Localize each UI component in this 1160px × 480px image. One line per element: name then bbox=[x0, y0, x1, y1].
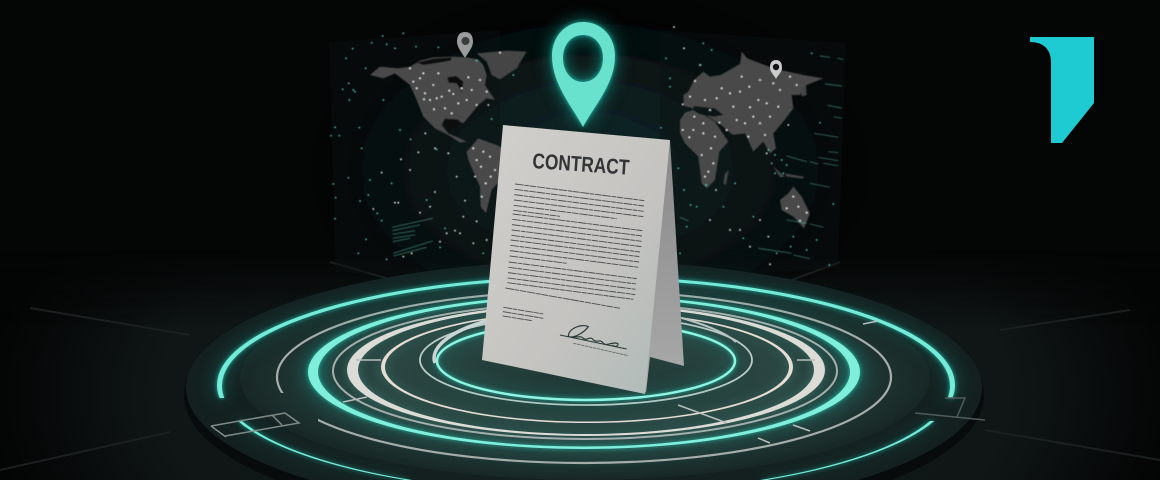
right inner white arc bbox=[682, 318, 736, 342]
right map continents bbox=[661, 27, 843, 265]
logo bbox=[1030, 37, 1094, 143]
left inner white arc bbox=[434, 320, 490, 363]
right panel glass bbox=[660, 30, 846, 280]
right map city dots bbox=[674, 27, 807, 264]
panel: circular platform bbox=[184, 261, 985, 480]
outer glowing ring bbox=[217, 276, 955, 480]
panel: left world map bbox=[329, 30, 527, 280]
contract heading: CONTRACT bbox=[532, 149, 630, 180]
panel: right world map bbox=[660, 27, 846, 280]
left map city dots bbox=[373, 53, 500, 257]
thick cyan ring bbox=[308, 295, 860, 449]
left panel glass bbox=[329, 30, 500, 280]
peach ring bbox=[381, 311, 793, 423]
ring connector ticks bbox=[343, 321, 878, 443]
thick white ring bbox=[347, 304, 825, 436]
signature bbox=[560, 326, 628, 356]
inner thin ring bbox=[420, 315, 752, 405]
right panel data text lines bbox=[680, 56, 843, 259]
background glow bbox=[300, 0, 880, 350]
floor seams bbox=[0, 262, 1160, 470]
contract body text lines bbox=[503, 184, 644, 321]
inner cyan ring bbox=[437, 322, 735, 400]
right marker box lines bbox=[915, 398, 985, 420]
thin ring 4 bbox=[333, 303, 837, 439]
floor bbox=[76, 288, 1094, 480]
paper front bbox=[482, 125, 670, 394]
left map continents bbox=[331, 33, 527, 259]
icon: right location pin bbox=[770, 60, 782, 79]
platform top bbox=[186, 261, 982, 480]
icon: large glowing location pin bbox=[552, 22, 615, 127]
paper back side bbox=[600, 140, 684, 393]
platform side bbox=[184, 264, 984, 480]
left panel data text lines bbox=[392, 218, 433, 256]
panel: contract paper bbox=[482, 125, 684, 394]
platform teal tone bbox=[240, 276, 930, 480]
thin grey ring bbox=[277, 291, 891, 463]
left marker box lines bbox=[211, 413, 299, 437]
icon: left grey location pin bbox=[457, 32, 473, 58]
